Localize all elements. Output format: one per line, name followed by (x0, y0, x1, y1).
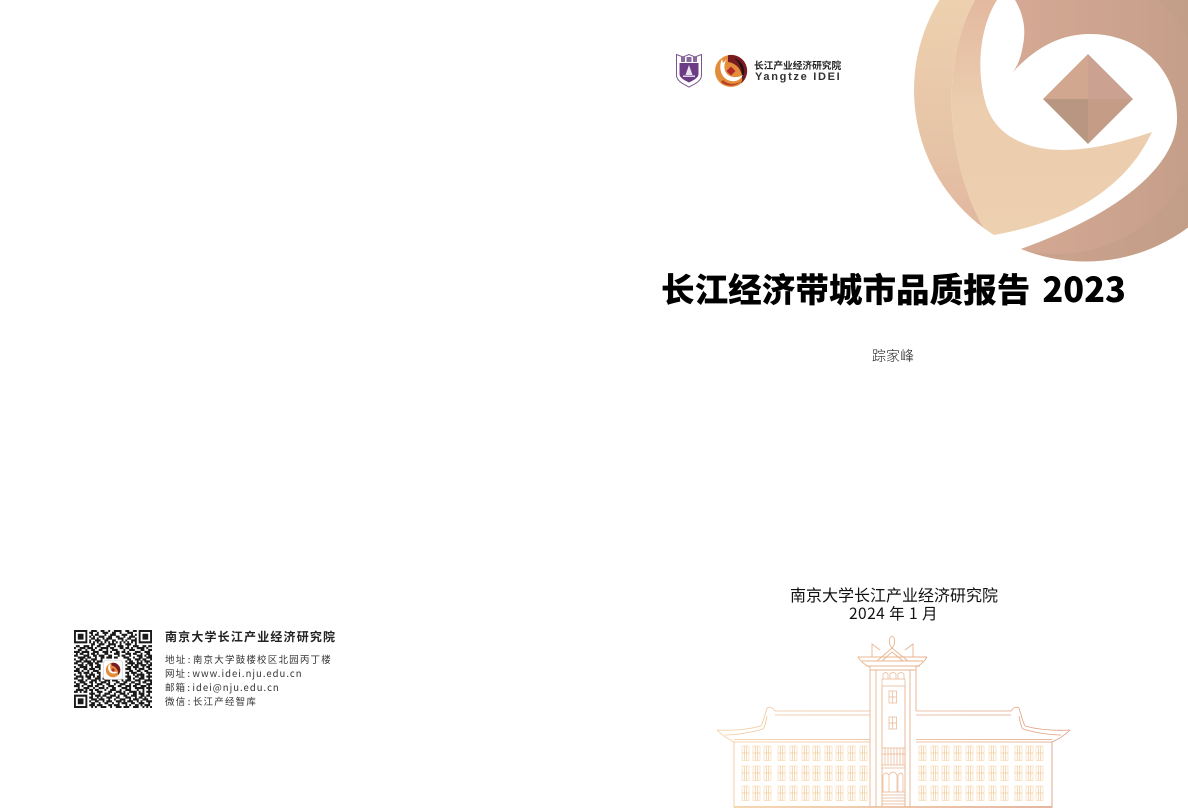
contact block heading: 南京大学长江产业经济研究院 (165, 628, 336, 644)
contact: email: 邮箱:idei@nju.edu.cn (165, 680, 280, 694)
QR centre logo (103, 660, 123, 680)
QR code (74, 630, 152, 708)
logo text: institute name: 长江产业经济研究院 (754, 58, 841, 72)
author: 踪家峰 (872, 346, 914, 366)
contact: WeChat: 微信:长江产经智库 (165, 694, 257, 708)
logo text: English name: Yangtze IDEI (755, 71, 841, 83)
emblem: decorative swirl top right (914, 0, 1188, 262)
logo: Yangtze IDEI mark (715, 54, 748, 87)
contact: website: 网址:www.idei.nju.edu.cn (165, 666, 303, 680)
illustration: university building line drawing (716, 636, 1070, 808)
logo: university shield (676, 54, 702, 88)
contact: address: 地址:南京大学鼓楼校区北园丙丁楼 (165, 652, 332, 666)
publisher: 南京大学长江产业经济研究院 (790, 582, 998, 606)
publication date: 2024 年 1 月 (849, 602, 938, 624)
title: 长江经济带城市品质报告 2023 (661, 262, 1126, 312)
